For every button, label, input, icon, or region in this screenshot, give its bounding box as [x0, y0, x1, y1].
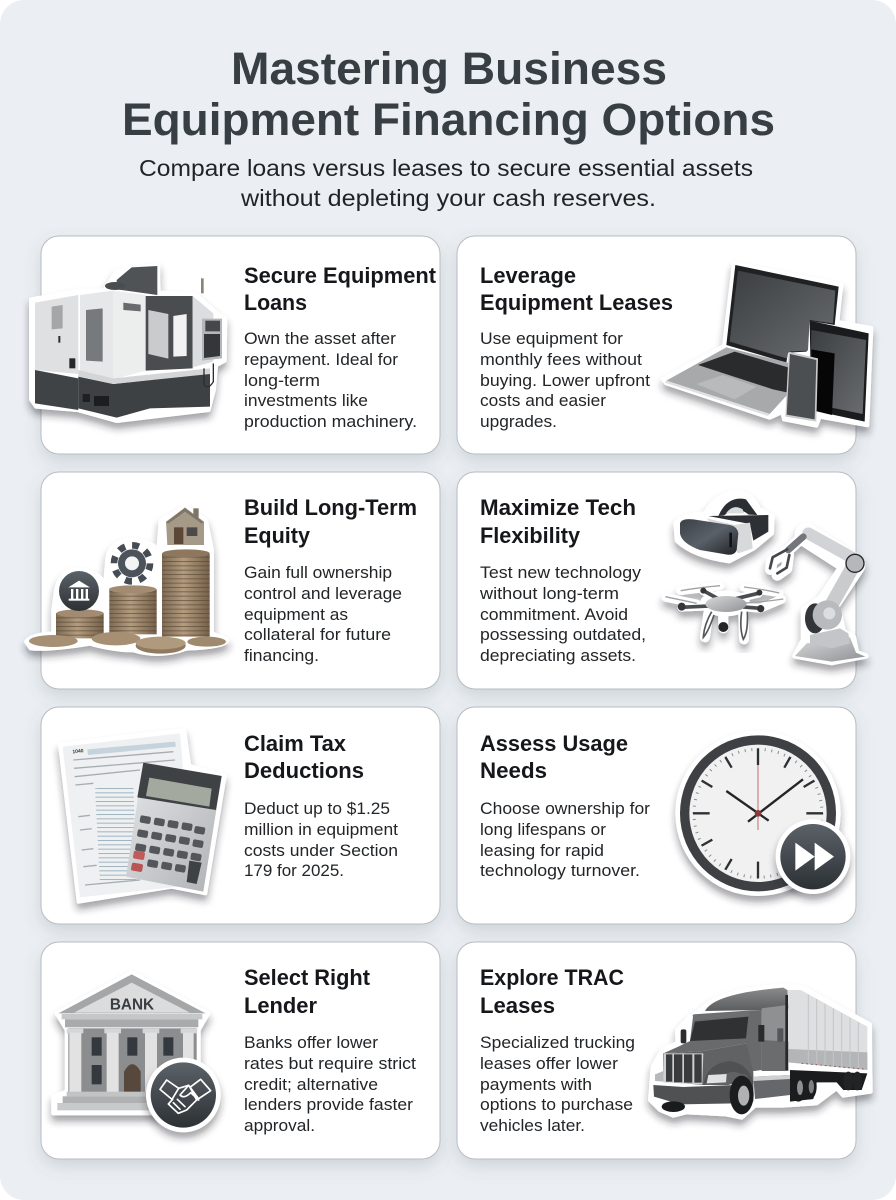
heading: Needs — [480, 758, 547, 783]
heading: Flexibility — [480, 523, 580, 548]
heading: Leverage — [480, 263, 576, 288]
body text: Choose ownership for — [480, 799, 650, 818]
heading — [480, 263, 673, 315]
icon: tax form and calculator: 1040 — [72, 748, 84, 755]
icon: semi truck — [650, 985, 871, 1118]
body text: production machinery. — [244, 412, 417, 431]
title: Equipment Financing Options — [122, 94, 775, 145]
body text: investments like — [244, 391, 368, 410]
icon: coin stacks — [26, 507, 228, 654]
title: Mastering Business — [231, 43, 667, 94]
heading: Explore TRAC — [480, 965, 624, 990]
body text: Use equipment for — [480, 329, 623, 348]
icon: CNC machine — [31, 265, 225, 421]
body text: leases offer lower — [480, 1054, 618, 1073]
body text: credit; alternative — [244, 1075, 378, 1094]
body text: lenders provide faster — [244, 1095, 413, 1114]
subtitle: without depleting your cash reserves. — [240, 185, 656, 211]
icon: tax form and calculator — [60, 730, 225, 902]
icon: laptop, tablet and phone — [663, 263, 871, 426]
body text: possessing outdated, — [480, 625, 646, 644]
heading — [480, 731, 628, 783]
subtitle: Compare loans versus leases to secure essential assets — [139, 155, 753, 181]
heading: Build Long-Term — [244, 495, 417, 520]
body text: long-term — [244, 371, 320, 390]
body text: financing. — [244, 646, 319, 665]
body text — [244, 329, 417, 431]
heading: Lender — [244, 993, 317, 1018]
body text: collateral for future — [244, 625, 391, 644]
body text — [244, 1033, 416, 1135]
icon: clock with fast-forward badge — [675, 731, 850, 896]
heading: Leases — [480, 993, 555, 1018]
body text: upgrades. — [480, 412, 557, 431]
body text — [480, 1033, 635, 1135]
body text — [480, 799, 650, 880]
body text: depreciating assets. — [480, 646, 636, 665]
heading — [244, 965, 370, 1018]
panel: claim tax deductions — [41, 707, 440, 924]
body text: monthly fees without — [480, 350, 642, 369]
body text: Own the asset after — [244, 329, 396, 348]
body text: equipment as — [244, 605, 348, 624]
body text — [480, 329, 650, 431]
panel: maximize tech flexibility — [457, 472, 866, 689]
body text: Banks offer lower — [244, 1033, 378, 1052]
icon: bank building — [53, 972, 221, 1132]
body text: without long-term — [479, 584, 619, 603]
heading — [480, 495, 636, 548]
heading — [244, 263, 436, 315]
panel: leverage equipment leases — [457, 236, 871, 454]
body text: payments with — [480, 1075, 592, 1094]
icon: robot arm — [770, 533, 866, 663]
icon: bank building: BANK — [110, 997, 154, 1014]
panel: secure equipment loans — [31, 236, 440, 454]
heading — [244, 731, 364, 783]
body text — [479, 563, 646, 665]
body text: buying. Lower upfront — [480, 371, 650, 390]
icon: VR headset — [675, 492, 773, 561]
heading: Equipment Leases — [480, 290, 673, 315]
panel: build long-term equity — [26, 472, 440, 689]
body text: costs under Section — [244, 841, 398, 860]
body text: Test new technology — [480, 563, 642, 582]
body text: Deduct up to $1.25 — [244, 799, 390, 818]
body text: commitment. Avoid — [480, 605, 628, 624]
body text: repayment. Ideal for — [244, 350, 398, 369]
heading — [244, 495, 417, 548]
heading: Assess Usage — [480, 731, 628, 756]
heading: Select Right — [244, 965, 370, 990]
body text — [244, 799, 398, 880]
body text: million in equipment — [244, 820, 398, 839]
heading: Maximize Tech — [480, 495, 636, 520]
subtitle — [139, 155, 753, 211]
panel: explore TRAC leases — [457, 942, 871, 1159]
heading: Loans — [244, 290, 307, 315]
body text: costs and easier — [480, 391, 606, 410]
body text: Specialized trucking — [480, 1033, 635, 1052]
title — [122, 43, 775, 145]
heading: Secure Equipment — [244, 263, 436, 288]
heading — [480, 965, 624, 1018]
icon: drone — [665, 586, 783, 639]
body text: approval. — [244, 1116, 315, 1135]
body text: options to purchase — [480, 1095, 633, 1114]
body text: 179 for 2025. — [244, 861, 344, 880]
body text: long lifespans or — [480, 820, 606, 839]
panel: assess usage needs — [457, 707, 856, 924]
body text: control and leverage — [244, 584, 402, 603]
panel: select right lender — [41, 942, 440, 1159]
body text: rates but require strict — [244, 1054, 416, 1073]
body text — [244, 563, 402, 665]
heading: Deductions — [244, 758, 364, 783]
body text: technology turnover. — [480, 861, 640, 880]
body text: vehicles later. — [480, 1116, 585, 1135]
body text: Gain full ownership — [244, 563, 392, 582]
body text: leasing for rapid — [480, 841, 604, 860]
heading: Equity — [244, 523, 310, 548]
heading: Claim Tax — [244, 731, 346, 756]
